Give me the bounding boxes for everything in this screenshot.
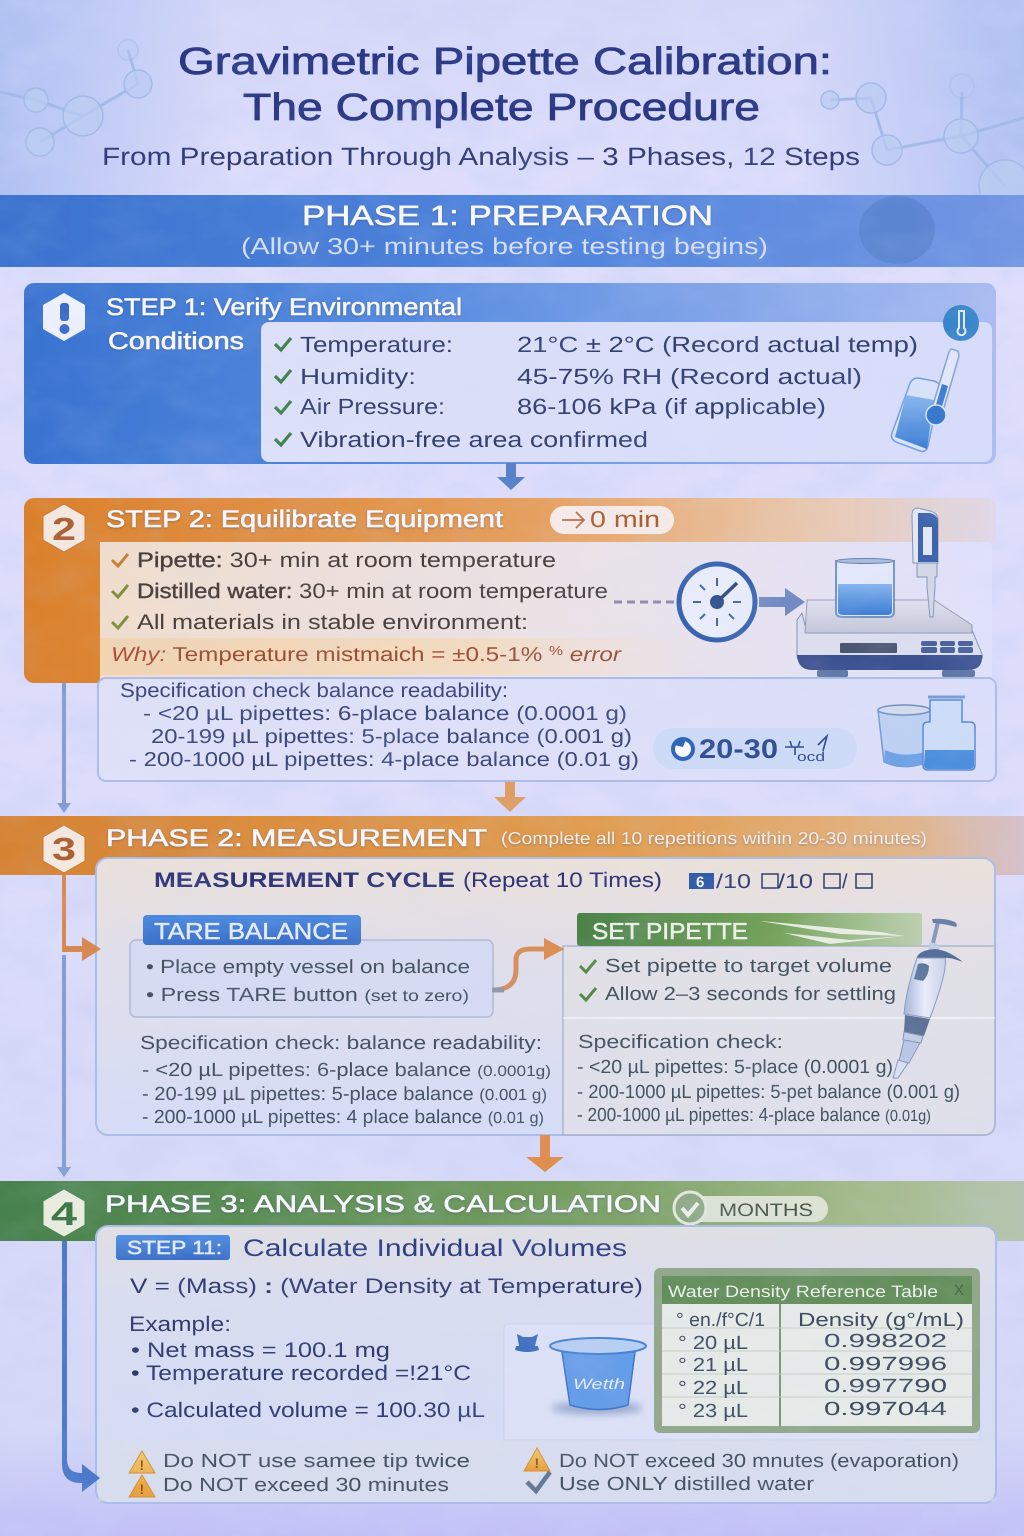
warnings: left <box>129 1451 470 1497</box>
pill: 20-30: 20-30 <box>699 734 778 764</box>
repetition tracker: /10 <box>778 871 813 893</box>
specification check: balance: - 200-1000 µL pipettes: 4-place balance (0.01 g) <box>129 749 639 771</box>
phase 1 heading: PHASE 1: PREPARATION <box>302 200 713 231</box>
title: The Complete Procedure <box>243 87 760 129</box>
icon: thermometer badge <box>943 305 979 341</box>
warnings: right: ! <box>534 1455 539 1471</box>
box: set pipette <box>563 913 995 1135</box>
warnings: left: Do NOT use samee tip twice <box>163 1451 470 1472</box>
icon: step 2 badge <box>43 504 85 552</box>
worked example: • Net mass = 100.1 mg <box>131 1339 390 1362</box>
specification check: balance: Specification check balance readability: <box>120 680 508 702</box>
table: water density: Water Density Reference Table <box>668 1283 938 1301</box>
step 1 heading: STEP 1: Verify Environmental <box>106 294 462 321</box>
table: water density: 0.997790 <box>824 1376 947 1397</box>
worked example: Example: <box>129 1313 231 1336</box>
pill: 0 min <box>550 506 674 534</box>
warnings: right <box>524 1448 959 1495</box>
warnings: left: ! <box>140 1457 144 1473</box>
step 11 label: STEP 11: <box>127 1238 222 1259</box>
pill: months <box>674 1192 828 1224</box>
panel: analysis <box>96 1226 996 1503</box>
specification check: right: Specification check: <box>578 1032 783 1053</box>
cycle heading: MEASUREMENT CYCLE <box>154 869 455 892</box>
warnings: right: Do NOT exceed 30 mnutes (evaporation) <box>559 1451 959 1472</box>
icon: step 3 badge: 3 <box>52 831 76 867</box>
pill: 20-30: ocd <box>797 749 825 764</box>
table: water density: ° 20 µL <box>678 1333 748 1354</box>
arrow: side line phase 1 to phase 2 <box>57 683 71 813</box>
specification check: right: - 200-1000 µL pipettes: 5-pet balance (0.001 g) <box>577 1082 960 1103</box>
specification check: balance <box>120 680 639 771</box>
warnings: right: Use ONLY distilled water <box>559 1474 815 1495</box>
repetition tracker: 6 <box>696 874 704 891</box>
balance <box>797 613 982 660</box>
beaker <box>836 561 894 617</box>
box: tare balance: • Place empty vessel on balance <box>146 957 470 978</box>
arrow: tare to set pipette <box>492 938 564 990</box>
illustration: beaker with thermometer <box>892 349 959 451</box>
checklist: environment: Vibration-free area confirmed <box>300 427 648 452</box>
illustration: gauge to balance <box>614 508 982 677</box>
specification check: right <box>577 1032 960 1126</box>
step 2 heading: STEP 2: Equilibrate Equipment <box>106 506 503 533</box>
worked example <box>129 1313 485 1422</box>
checklist: equilibration: Pipette: 30+ min at room temperature <box>137 549 556 572</box>
arrow: step 2 to phase 2 <box>494 782 526 812</box>
icon: step 4 badge: 4 <box>51 1195 78 1232</box>
specification check: right: - <20 µL pipettes: 5-place (0.0001 g) <box>577 1057 893 1078</box>
phase 2 heading: PHASE 2: MEASUREMENT <box>106 825 487 852</box>
header: title and molecules <box>0 40 1024 212</box>
table: water density <box>654 1268 980 1433</box>
arrow: measurement to phase 3 <box>526 1135 564 1172</box>
cycle heading: (Repeat 10 Times) <box>463 869 662 892</box>
box: set pipette: SET PIPETTE <box>592 918 748 944</box>
box: tare balance: • Press TARE button (set to zero) <box>146 985 469 1006</box>
arrow: blue side line to phase 3 <box>57 955 71 1177</box>
phase 2 note: (Complete all 10 repetitions within 20-30 minutes) <box>501 829 927 848</box>
specification check: balance: - <20 µL pipettes: 6-place balance (0.0001 g) <box>143 703 627 725</box>
checklist: environment: 21°C ± 2°C (Record actual temp) <box>517 332 918 357</box>
checklist: environment: Air Pressure: <box>300 394 445 419</box>
panel: step 2 <box>24 498 996 781</box>
icon: molecule right <box>821 74 1024 212</box>
icon: step 3 badge <box>43 825 85 873</box>
box: tare balance <box>130 915 493 1017</box>
pill: 20-30 <box>653 728 857 769</box>
checklist: equilibration <box>112 549 608 634</box>
step 1 heading <box>106 294 462 355</box>
phase 3 banner <box>0 1181 1024 1241</box>
checklist: equilibration: Distilled water: 30+ min at room temperature <box>137 580 608 603</box>
table: water density: X <box>954 1282 964 1299</box>
table: water density: 0.997044 <box>824 1399 948 1420</box>
title: Gravimetric Pipette Calibration: <box>178 41 832 83</box>
specification check: balance: 20-199 µL pipettes: 5-place balance (0.001 g) <box>151 726 632 748</box>
icon: step 2 badge: 2 <box>52 511 76 547</box>
phase 1 note: (Allow 30+ minutes before testing begins) <box>241 233 768 259</box>
illustration: cup: Wetth <box>573 1376 625 1393</box>
repetition tracker <box>689 871 872 893</box>
icon: molecule left <box>0 40 152 156</box>
cycle heading <box>154 869 662 892</box>
phase 2 banner <box>0 816 1024 875</box>
specification check: left: - 20-199 µL pipettes: 5-place balance (0.001 g) <box>142 1084 547 1105</box>
warnings: left: ! <box>140 1481 144 1497</box>
checklist: equilibration: All materials in stable environment: <box>137 611 528 634</box>
worked example: • Temperature recorded =!21°C <box>131 1362 471 1385</box>
pill: 0 min: 0 min <box>590 506 660 532</box>
box: set pipette: Allow 2–3 seconds for settling <box>605 984 896 1005</box>
step 11 heading: Calculate Individual Volumes <box>243 1235 627 1262</box>
table: water density: 0.998202 <box>824 1331 947 1352</box>
why note: Why: Temperature mistmaich = ±0.5-1% <box>111 644 476 666</box>
step 1 heading: Conditions <box>108 328 244 355</box>
table: water density: ° en./f°C/1 <box>676 1310 765 1331</box>
specification check: left <box>140 1033 551 1128</box>
box: set pipette: Set pipette to target volume <box>605 956 892 977</box>
repetition tracker: /10 <box>716 871 751 893</box>
icon: step 4 badge <box>43 1189 85 1237</box>
illustration: cup <box>515 1334 646 1414</box>
icon: alert badge <box>43 293 85 341</box>
illustration: cup and flask <box>878 697 975 770</box>
table: water density: ° 23 µL <box>678 1401 748 1422</box>
specification check: left: - <20 µL pipettes: 6-place balance (0.0001g) <box>142 1060 551 1081</box>
warnings: left: Do NOT exceed 30 minutes <box>163 1475 449 1496</box>
repetition tracker: / <box>842 871 848 893</box>
subtitle: From Preparation Through Analysis – 3 Phases, 12 Steps <box>102 143 860 171</box>
title <box>178 41 832 129</box>
illustration: pipette <box>893 919 963 1078</box>
sub-panel behind illustration <box>504 1324 980 1440</box>
why note: error <box>563 644 623 666</box>
specification check: left: Specification check: balance readability: <box>140 1033 542 1054</box>
step 11 label <box>116 1235 230 1260</box>
specification check: right: - 200-1000 µL pipettes: 4-place balance (0.01g) <box>577 1105 931 1126</box>
checklist: environment: Temperature: <box>300 332 453 357</box>
checklist: environment <box>275 332 918 452</box>
checklist: environment: 86-106 kPa (if applicable) <box>517 394 826 419</box>
worked example: • Calculated volume = 100.30 µL <box>131 1399 485 1422</box>
checklist: environment: 45-75% RH (Record actual) <box>517 364 862 389</box>
warning strip <box>98 1440 994 1501</box>
formula: V = (Mass) : (Water Density at Temperature) <box>130 1275 643 1298</box>
table: water density: ° 22 µL <box>678 1378 748 1399</box>
phase 3 heading: PHASE 3: ANALYSIS & CALCULATION <box>105 1191 661 1218</box>
specification check: left: - 200-1000 µL pipettes: 4 place balance (0.01 g) <box>142 1107 544 1128</box>
why note: % <box>549 643 564 658</box>
arrow: step 1 to step 2 <box>497 463 525 490</box>
checklist: environment: Humidity: <box>300 364 416 389</box>
panel: measurement cycle <box>96 858 995 1135</box>
table: water density: 0.997996 <box>824 1354 947 1375</box>
pipette <box>912 508 938 563</box>
panel: step 1 <box>24 283 996 464</box>
box: tare balance: TARE BALANCE <box>154 918 348 944</box>
pill: months: MONTHS <box>719 1200 813 1220</box>
table: water density: Density (g°/mL) <box>798 1310 964 1331</box>
arrow: orange side line into cycle <box>62 875 101 961</box>
phase 1 banner <box>0 195 1024 267</box>
table: water density: ° 21 µL <box>678 1355 748 1376</box>
arrow: blue side line to analysis <box>62 1241 100 1492</box>
